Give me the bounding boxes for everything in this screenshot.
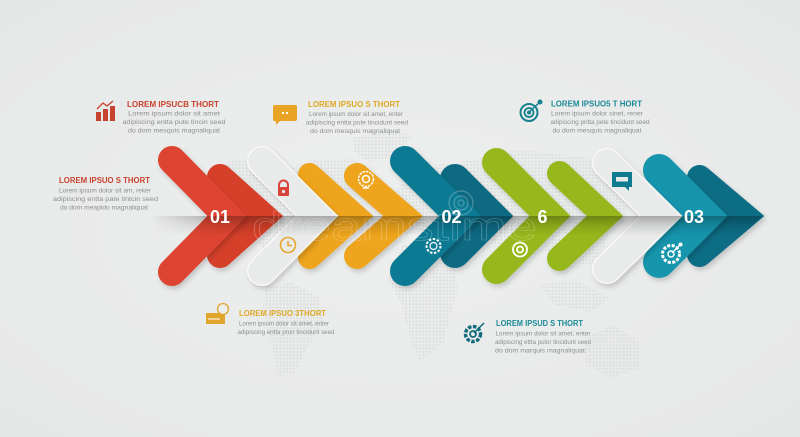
chevron 3: orange xyxy=(310,174,356,258)
icon: message xyxy=(206,304,228,324)
heading: LOREM IPSUO 3THORT xyxy=(239,308,327,318)
body text: adipiscing pritta pete tincidunt seed xyxy=(550,119,650,126)
body text: adipiscing entta pute tincidunt seed xyxy=(306,120,408,126)
body text: Lorem ipsum dolor sit amet xyxy=(128,110,220,118)
body text: do dom mesquis magnaliquat xyxy=(552,128,642,134)
body text: Lorem ipsum dolor sit amet, enter xyxy=(309,111,404,118)
callout: top right xyxy=(520,98,650,134)
icon: chat bubble xyxy=(273,105,297,125)
body text: adipiscing entta pute tincin seed xyxy=(122,119,226,126)
body text: do dom mesquis magnaliquat xyxy=(128,128,220,134)
body text: Lorem ipsum dolor sit am, reker xyxy=(59,188,152,194)
chevron 11: dark teal xyxy=(700,178,745,254)
chevron 5: large teal xyxy=(405,161,460,271)
icon: padlock xyxy=(278,180,289,196)
body text: do dom mesquis magnaliquat xyxy=(310,128,400,135)
icon: gear target xyxy=(466,323,484,342)
callout: top middle xyxy=(273,99,408,135)
step number 02: 02 xyxy=(441,207,462,227)
step number 6: 6 xyxy=(537,207,548,227)
chevron 8: green xyxy=(560,174,605,258)
dotted world map xyxy=(205,130,650,378)
icon: bar chart xyxy=(96,101,115,121)
axis shadow band xyxy=(158,216,762,232)
body text: adipiscing entta pron tincidunt seed xyxy=(238,329,335,336)
heading: LOREM IPSUCB THORT xyxy=(127,99,220,109)
icon: watermark spiral xyxy=(449,191,473,215)
step number 01: 01 xyxy=(210,207,230,227)
callout: left xyxy=(53,175,158,212)
body text: do dom meapido magnaliquat xyxy=(60,204,148,212)
icon: target xyxy=(520,100,542,121)
icon: speech bubble xyxy=(612,172,632,191)
heading: LOREM IPSUO S THORT xyxy=(59,175,151,185)
body text xyxy=(238,320,335,336)
body text: Lorem ipsum dolor sinet, rener xyxy=(551,110,644,118)
heading: LOREM IPSUD S THORT xyxy=(496,318,584,328)
body text xyxy=(495,330,591,354)
chevron 6: dark teal xyxy=(455,179,492,253)
body text: Lorem ipsum dolor sit amet, enter xyxy=(239,320,330,328)
icon: clock xyxy=(280,238,296,252)
body text xyxy=(122,110,226,134)
callout: top left xyxy=(96,99,226,134)
chevron 9: white xyxy=(607,163,661,269)
body text: adipiscing ettta pulor tincidunt seed xyxy=(495,339,591,346)
chevron 1a: large red xyxy=(172,160,227,272)
icon: target ring xyxy=(513,242,527,256)
step number 03: 03 xyxy=(684,207,704,227)
chevron 4: orange xyxy=(357,176,403,256)
chevron 7: large green xyxy=(496,162,550,270)
body text xyxy=(53,188,158,212)
heading: LOREM IPSUO S THORT xyxy=(308,99,401,109)
chevron 10: light teal xyxy=(659,170,705,262)
body text xyxy=(306,111,408,135)
body text: adipiscing entta pate tintcin seed xyxy=(53,196,158,203)
body text: do dom marquis magnaliquat xyxy=(495,348,585,354)
heading: LOREM IPSUO5 T HORT xyxy=(551,98,643,108)
callout: bottom left xyxy=(206,304,335,336)
icon: gear xyxy=(426,239,440,253)
watermark: dreamstime xyxy=(252,205,537,249)
icon: gear target xyxy=(662,242,682,262)
chevron 1b: dark red xyxy=(220,177,264,255)
chevron 2: white xyxy=(262,161,317,271)
icon: gear bulb xyxy=(358,172,374,188)
body text xyxy=(550,110,650,134)
body text: Lorem ipsum dolor sit amet, enter xyxy=(496,330,591,338)
callout: bottom right xyxy=(466,318,591,354)
